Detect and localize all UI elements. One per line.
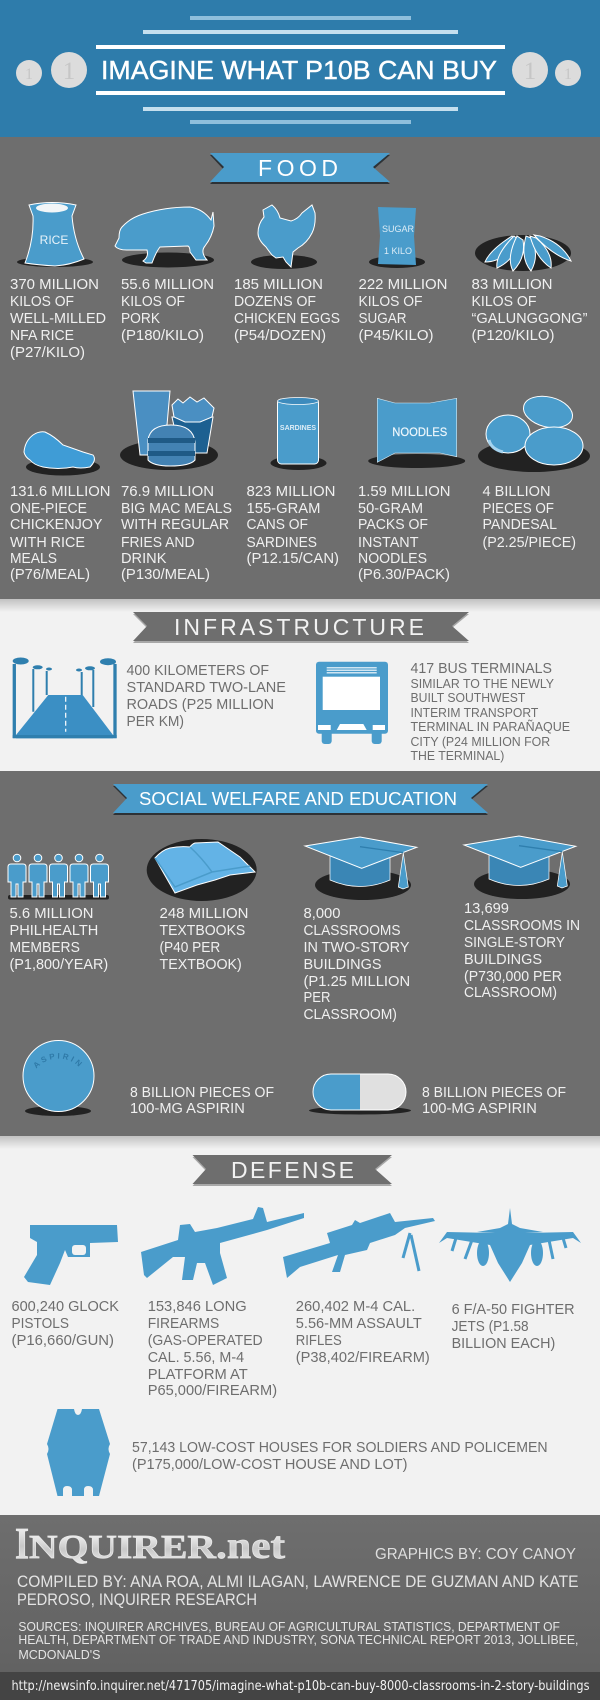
icon: coins right: 1	[564, 66, 572, 83]
text: long firearms: 153,846 LONG	[148, 1298, 247, 1315]
text: rice: 370 MILLION	[10, 276, 99, 293]
text: sardines	[246, 483, 339, 567]
text: big mac	[121, 483, 232, 583]
icon: noodles pack	[368, 398, 465, 468]
text: big mac: DRINK	[121, 550, 166, 567]
text: textbooks: TEXTBOOKS	[160, 922, 245, 939]
text: single-story classrooms: (P730,000 PER	[464, 968, 562, 985]
panel: footer	[0, 1515, 600, 1700]
heading: social welfare ribbon: SOCIAL WELFARE AND EDUCATION	[139, 789, 457, 809]
panel: infrastructure	[13, 612, 570, 763]
text: pistols: PISTOLS	[12, 1315, 69, 1332]
icon: chicken	[251, 205, 317, 269]
text: rice: (P27/KILO)	[10, 344, 85, 361]
text: capsule: 100-MG ASPIRIN	[422, 1100, 537, 1117]
icon: textbook	[147, 839, 257, 901]
icon: graduation cap 2	[464, 836, 576, 899]
text: rice: NFA RICE	[10, 327, 74, 344]
icon: sugar bag	[369, 207, 425, 268]
icon: coins right	[512, 52, 581, 88]
text: big mac: BIG MAC MEALS	[121, 500, 232, 517]
text: noodles: NOODLES	[358, 550, 427, 567]
icon: sugar bag: 1 KILO	[384, 246, 412, 256]
text: aspirin: 8 BILLION PIECES OF	[130, 1084, 274, 1101]
text: assault rifles: 260,402 M-4 CAL.	[296, 1298, 415, 1315]
logo: inquirer.net: .net	[216, 1525, 285, 1567]
text: two-story classrooms: CLASSROOM)	[304, 1006, 397, 1023]
text: roads: 400 KILOMETERS OF	[126, 662, 269, 679]
text: big mac: (P130/MEAL)	[121, 566, 210, 583]
icon: sardines can	[270, 398, 326, 470]
text: roads: ROADS (P25 MILLION	[126, 696, 274, 713]
text: sugar: SUGAR	[358, 310, 407, 327]
text: assault rifles: (P38,402/FIREARM)	[296, 1349, 430, 1366]
text: pandesal: (P2.25/PIECE)	[482, 534, 576, 551]
text: pork: (P180/KILO)	[121, 327, 204, 344]
text: eggs: 185 MILLION	[234, 276, 323, 293]
text: chickenjoy: WITH RICE	[10, 534, 85, 551]
text: sardines: SARDINES	[246, 534, 317, 551]
text: bus terminals: TERMINAL IN PARAÑAQUE	[410, 720, 570, 734]
text: two-story classrooms: 8,000	[304, 905, 340, 922]
credit: compiled by: PEDROSO, INQUIRER RESEARCH	[17, 1591, 257, 1609]
text: two-story classrooms: CLASSROOMS	[304, 922, 400, 939]
heading: social welfare ribbon	[113, 784, 488, 815]
text: two-story classrooms: PER	[304, 989, 331, 1006]
icon: people	[8, 854, 109, 900]
icon: capsule	[309, 1074, 411, 1114]
text: single-story classrooms: CLASSROOMS IN	[464, 917, 580, 934]
icon: pistol	[24, 1225, 118, 1285]
text: chickenjoy: (P76/MEAL)	[10, 566, 90, 583]
text: fighter jets: 6 F/A-50 FIGHTER	[452, 1301, 575, 1318]
panel: food	[0, 137, 600, 599]
text: philhealth: 5.6 MILLION	[10, 905, 94, 922]
text: bus terminals: SIMILAR TO THE NEWLY	[410, 677, 555, 691]
text: fighter jets: JETS (P1.58	[452, 1318, 529, 1335]
text: houses: (P175,000/LOW-COST HOUSE AND LOT)	[132, 1456, 408, 1473]
text: pandesal	[482, 483, 576, 551]
icon: rice sack: RICE	[40, 233, 68, 247]
icon: long firearm	[141, 1207, 304, 1285]
icon: coins left: 1	[25, 66, 33, 83]
icon: aspirin tablet: ASPIRIN	[34, 1053, 82, 1068]
text: two-story classrooms: BUILDINGS	[304, 956, 382, 973]
panel: defense	[12, 1155, 581, 1496]
panel: social welfare and education	[0, 771, 600, 1136]
text: eggs: (P54/DOZEN)	[234, 327, 326, 344]
text: bus terminals: CITY (P24 MILLION FOR	[410, 735, 550, 749]
text: pandesal: PIECES OF	[482, 500, 554, 517]
text: chickenjoy: CHICKENJOY	[10, 516, 102, 533]
icon: road	[13, 658, 117, 738]
credit: graphics: GRAPHICS BY: COY CANOY	[375, 1546, 576, 1563]
text: single-story classrooms: 13,699	[464, 900, 509, 917]
icon: pig	[115, 207, 214, 268]
text: rice: KILOS OF	[10, 293, 74, 310]
text: noodles: (P6.30/PACK)	[358, 566, 450, 583]
text: chickenjoy: MEALS	[10, 550, 57, 567]
text: capsule: 8 BILLION PIECES OF	[422, 1084, 566, 1101]
title: IMAGINE WHAT P10B CAN BUY	[101, 55, 497, 85]
icon: pandesal	[478, 391, 590, 472]
icon: coins right: 1	[524, 58, 536, 85]
text: long firearms: P65,000/FIREARM)	[148, 1382, 277, 1399]
text: sugar: 222 MILLION	[358, 276, 448, 293]
heading: food ribbon	[210, 153, 390, 184]
text: single-story classrooms	[464, 900, 580, 1001]
icon: fighter jet	[439, 1208, 581, 1282]
text: sardines: 823 MILLION	[246, 483, 336, 500]
text: two-story classrooms: IN TWO-STORY	[304, 939, 410, 956]
heading: infrastructure ribbon: INFRASTRUCTURE	[174, 614, 424, 640]
text: rice: WELL-MILLED	[10, 310, 106, 327]
text: bus terminals: INTERIM TRANSPORT	[410, 706, 539, 720]
credit: sources: SOURCES: INQUIRER ARCHIVES, BUREAU OF AGRICULTURAL STATISTICS, DEPARTMENT OF	[18, 1619, 560, 1634]
text: assault rifles: RIFLES	[296, 1332, 342, 1349]
text: houses: 57,143 LOW-COST HOUSES FOR SOLDIERS AND POLICEMEN	[132, 1439, 548, 1456]
text: eggs: CHICKEN EGGS	[234, 310, 340, 327]
credit: compiled by: COMPILED BY: ANA ROA, ALMI ILAGAN, LAWRENCE DE GUZMAN AND KATE	[17, 1573, 578, 1591]
text: aspirin: 100-MG ASPIRIN	[130, 1100, 245, 1117]
text: textbooks: TEXTBOOK)	[160, 956, 242, 973]
logo: inquirer.net: I	[15, 1519, 29, 1568]
text: textbooks: (P40 PER	[160, 939, 220, 956]
icon: assault rifle	[283, 1213, 435, 1278]
text: pork: KILOS OF	[121, 293, 185, 310]
text: sardines: (P12.15/CAN)	[246, 550, 339, 567]
text: two-story classrooms	[304, 905, 410, 1023]
text: noodles: 1.59 MILLION	[358, 483, 450, 500]
credit: sources: HEALTH, DEPARTMENT OF TRADE AND INDUSTRY, SONA TECHNICAL REPORT 2013, JOLLIBEE,	[18, 1632, 578, 1647]
heading: defense ribbon: DEFENSE	[231, 1157, 354, 1183]
credit: sources	[18, 1619, 578, 1662]
heading: infrastructure ribbon	[133, 612, 469, 643]
icon: coins left: 1	[63, 58, 75, 85]
text: pandesal: PANDESAL	[482, 516, 557, 533]
text: rice	[10, 276, 106, 361]
text: philhealth: (P1,800/YEAR)	[10, 956, 108, 973]
text: galunggong	[472, 276, 588, 344]
text: fighter jets	[452, 1301, 575, 1352]
text: noodles: INSTANT	[358, 534, 418, 551]
icon: rice sack	[17, 202, 93, 267]
icon: aspirin tablet	[22, 1040, 94, 1116]
text: noodles: PACKS OF	[358, 516, 428, 533]
icon: sugar bag: SUGAR	[382, 224, 414, 234]
text: pork: PORK	[121, 310, 160, 327]
text: long firearms: (GAS-OPERATED	[148, 1332, 263, 1349]
text: noodles: 50-GRAM	[358, 500, 423, 517]
text: noodles	[358, 483, 450, 583]
text: philhealth: MEMBERS	[10, 939, 80, 956]
text: fighter jets: BILLION EACH)	[452, 1335, 555, 1352]
text: galunggong: (P120/KILO)	[472, 327, 555, 344]
text: bus terminals: THE TERMINAL)	[410, 749, 504, 763]
text: pandesal: 4 BILLION	[482, 483, 550, 500]
icon: low-cost house	[47, 1409, 110, 1496]
text: assault rifles	[296, 1298, 430, 1366]
text: big mac: FRIES AND	[121, 534, 195, 551]
text: galunggong: “GALUNGGONG”	[472, 310, 588, 327]
text: aspirin	[130, 1084, 274, 1117]
text: big mac: 76.9 MILLION	[121, 483, 214, 500]
text: two-story classrooms: (P1.25 MILLION	[304, 973, 410, 990]
text: roads: PER KM)	[126, 713, 184, 730]
text: sugar: (P45/KILO)	[358, 327, 434, 344]
heading: food ribbon: FOOD	[258, 155, 338, 181]
text: long firearms: PLATFORM AT	[148, 1366, 248, 1383]
text: single-story classrooms: BUILDINGS	[464, 951, 542, 968]
text: sardines: 155-GRAM	[246, 500, 320, 517]
text: bus terminals: BUILT SOUTHWEST	[410, 691, 526, 705]
url bar	[0, 1672, 600, 1700]
text: pork: 55.6 MILLION	[121, 276, 214, 293]
text: chickenjoy	[10, 483, 110, 583]
text: pistols	[12, 1298, 119, 1349]
text: pistols: 600,240 GLOCK	[12, 1298, 119, 1315]
icon: sardines can: SARDINES	[280, 425, 316, 432]
heading: defense ribbon	[192, 1155, 392, 1186]
text: chickenjoy: ONE-PIECE	[10, 500, 87, 517]
text: philhealth: PHILHEALTH	[10, 922, 98, 939]
text: textbooks	[160, 905, 248, 973]
icon: galunggong fish	[475, 235, 571, 271]
text: pork	[121, 276, 214, 344]
logo: inquirer.net: NQUIRER	[29, 1529, 217, 1566]
icon: bus	[316, 662, 388, 744]
text: sugar: KILOS OF	[358, 293, 422, 310]
logo: inquirer.net	[15, 1519, 285, 1568]
text: long firearms	[148, 1298, 277, 1399]
text: assault rifles: 5.56-MM ASSAULT	[296, 1315, 422, 1332]
text: big mac: WITH REGULAR	[121, 516, 229, 533]
credit: sources: MCDONALD'S	[18, 1647, 101, 1662]
text: galunggong: KILOS OF	[472, 293, 536, 310]
text: long firearms: CAL. 5.56, M-4	[148, 1349, 244, 1366]
text: bus terminals: 417 BUS TERMINALS	[410, 660, 552, 677]
text: long firearms: FIREARMS	[148, 1315, 219, 1332]
text: philhealth	[10, 905, 108, 973]
text: galunggong: 83 MILLION	[472, 276, 552, 293]
icon: coins left	[16, 52, 87, 88]
text: chickenjoy: 131.6 MILLION	[10, 483, 110, 500]
text: eggs	[234, 276, 340, 344]
text: sugar	[358, 276, 448, 344]
text: roads: STANDARD TWO-LANE	[126, 679, 286, 696]
text: roads	[126, 662, 286, 730]
text: single-story classrooms: SINGLE-STORY	[464, 934, 565, 951]
text: textbooks: 248 MILLION	[160, 905, 248, 922]
text: single-story classrooms: CLASSROOM)	[464, 984, 557, 1001]
icon: chicken joy	[24, 432, 100, 476]
panel: header	[0, 0, 600, 137]
text: eggs: DOZENS OF	[234, 293, 316, 310]
icon: big mac meal	[120, 391, 218, 470]
icon: noodles pack: NOODLES	[392, 425, 447, 439]
icon: graduation cap 1	[305, 837, 417, 900]
text: pistols: (P16,660/GUN)	[12, 1332, 114, 1349]
text: capsule	[422, 1084, 566, 1117]
text: houses	[132, 1439, 548, 1473]
credit: compiled by	[17, 1573, 578, 1609]
text: sardines: CANS OF	[246, 516, 308, 533]
text: bus terminals	[410, 660, 570, 763]
